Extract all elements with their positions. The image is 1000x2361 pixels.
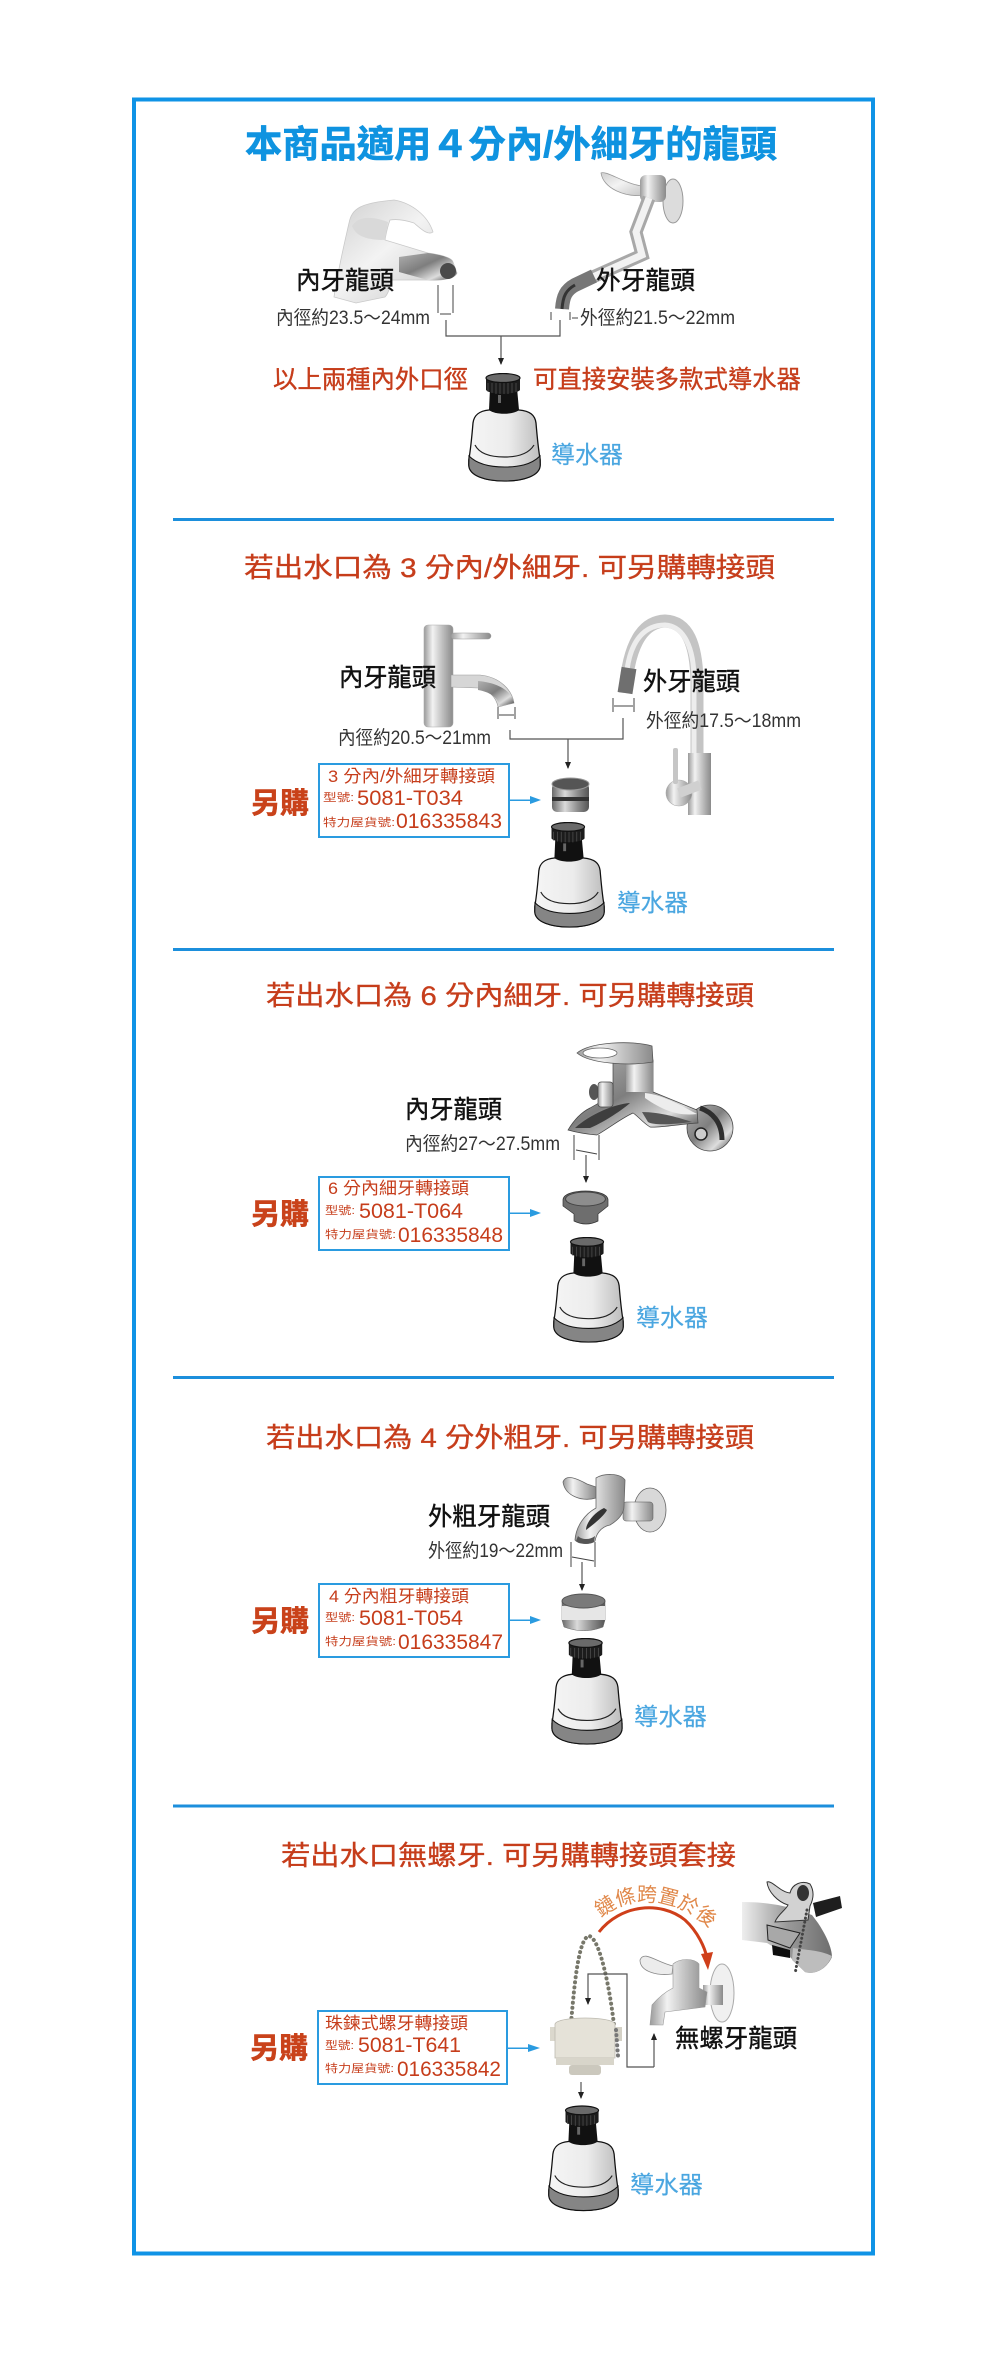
outer frame: [134, 100, 873, 2254]
adapter info box: 特力屋貨號:: [325, 2061, 394, 2075]
adapter info box: [319, 764, 509, 837]
icon: diverter: [535, 822, 604, 927]
adapter info box: 型號:: [325, 2038, 354, 2052]
connector arrow: [446, 320, 560, 364]
icon: gooseneck wall faucet: [562, 173, 683, 309]
heading: 若出水口為 6 分內細牙. 可另購轉接頭: [266, 981, 754, 1011]
dimension: 內徑約27～27.5mm: [405, 1133, 560, 1155]
heading: 若出水口無螺牙. 可另購轉接頭套接: [281, 1841, 736, 1871]
icon: bath mixer faucet: [568, 1043, 733, 1151]
adapter info box: 特力屋貨號:: [325, 1634, 396, 1648]
icon: diverter: [469, 374, 540, 481]
adapter info box: 016335842: [397, 2058, 501, 2081]
icon: beige chain adapter: [550, 2018, 622, 2075]
dimension: [405, 1133, 599, 1160]
adapter info box: 016335848: [398, 1224, 503, 1247]
panel: three-point thread: [244, 553, 801, 927]
dimension: inner diameter: [276, 285, 453, 329]
dimension: 外徑約17.5～18mm: [646, 710, 801, 732]
label: 外牙龍頭: [643, 668, 740, 696]
label: 無螺牙龍頭: [675, 2025, 797, 2053]
adapter info box: 型號:: [325, 1203, 355, 1217]
extra purchase: 另購: [250, 2032, 308, 2065]
label: 內牙龍頭: [405, 1096, 502, 1124]
adapter info box: 5081-T034: [357, 787, 463, 810]
icon: diverter: [552, 1638, 622, 1744]
label: 導水器: [634, 1704, 707, 1731]
adapter info box: 3 分內/外細牙轉接頭: [328, 767, 495, 786]
dimension: inner diameter: 內徑約23.5～24mm: [276, 307, 430, 329]
adapter info box: 型號:: [323, 790, 354, 804]
extra purchase: 另購: [251, 1198, 309, 1231]
adapter info box: 016335843: [396, 810, 502, 833]
icon: adapter: [552, 778, 589, 812]
label: 內牙龍頭: [339, 664, 436, 692]
icon: adapter: [563, 1191, 608, 1224]
adapter info box: [319, 1584, 509, 1657]
red note left: 以上兩種內外口徑: [273, 366, 468, 394]
dimension: [428, 1540, 595, 1567]
adapter info box: 特力屋貨號:: [325, 1227, 396, 1241]
label: inner thread faucet: 內牙龍頭: [296, 267, 394, 295]
icon: wall tap: [563, 1474, 666, 1544]
heading: 若出水口為 3 分內/外細牙. 可另購轉接頭: [244, 553, 775, 583]
adapter info box: 6 分內細牙轉接頭: [328, 1179, 469, 1198]
panel: four-point coarse thread: [251, 1423, 754, 1744]
adapter info box: 5081-T641: [358, 2034, 461, 2057]
panel: unthreaded outlet: [250, 1841, 842, 2212]
connector arrow: [510, 718, 623, 768]
icon: adapter: [562, 1594, 605, 1631]
photo: hand fitting adapter: [742, 1882, 842, 1974]
label: 導水器: [636, 1305, 708, 1332]
adapter info box: 5081-T054: [359, 1607, 463, 1630]
down arrow: [580, 2082, 582, 2098]
label: 導水器: [630, 2172, 703, 2199]
dimension: [338, 707, 515, 749]
icon: gooseneck kitchen faucet: [625, 621, 711, 815]
adapter info box: 4 分內粗牙轉接頭: [329, 1587, 469, 1606]
adapter info box: 016335847: [398, 1631, 503, 1654]
red note right: 可直接安裝多款式導水器: [533, 366, 801, 394]
dimension: outer diameter: 外徑約21.5～22mm: [580, 307, 735, 329]
dimension: [613, 698, 801, 732]
label: 外粗牙龍頭: [428, 1503, 550, 1531]
red curved arrow: [599, 1908, 713, 1970]
arrow: [509, 1209, 541, 1217]
icon: diverter: [549, 2106, 618, 2211]
icon: unthreaded tap: [640, 1956, 734, 2025]
curved caption: 鏈條跨置於後: [594, 1884, 716, 1928]
panel: four-point fine thread faucets: [245, 124, 801, 481]
dimension: 外徑約19～22mm: [428, 1540, 563, 1562]
arrow: [507, 2044, 540, 2052]
extra purchase: 另購: [251, 787, 309, 820]
icon: single lever basin faucet: [334, 200, 457, 303]
icon: bead chain: [571, 1936, 614, 2025]
extra purchase: 另購: [251, 1605, 309, 1638]
routing arrows: [588, 1974, 654, 2067]
adapter info box: [319, 1177, 509, 1250]
arrow: [509, 796, 541, 804]
connector arrow: [585, 1155, 587, 1182]
adapter info box: 珠鍊式螺牙轉接頭: [325, 2014, 468, 2033]
adapter info box: 型號:: [325, 1610, 355, 1624]
dimension: 內徑約20.5～21mm: [338, 727, 491, 749]
label: outer thread faucet: 外牙龍頭: [596, 267, 695, 295]
icon: diverter: [554, 1237, 623, 1342]
label: diverter: 導水器: [551, 442, 623, 469]
heading: 若出水口為 4 分外粗牙. 可另購轉接頭: [266, 1423, 754, 1453]
adapter info box: [318, 2011, 507, 2084]
adapter info box: 5081-T064: [359, 1200, 463, 1223]
connector arrow: [581, 1562, 583, 1590]
label: 導水器: [617, 890, 688, 917]
arrow: [509, 1616, 541, 1624]
title: 本商品適用４分內/外細牙的龍頭: [245, 124, 777, 165]
icon: modern basin faucet: [424, 625, 514, 727]
panel: six-point inner thread: [251, 981, 754, 1342]
curve path guide: [601, 1901, 712, 1930]
adapter info box: 特力屋貨號:: [323, 815, 395, 829]
